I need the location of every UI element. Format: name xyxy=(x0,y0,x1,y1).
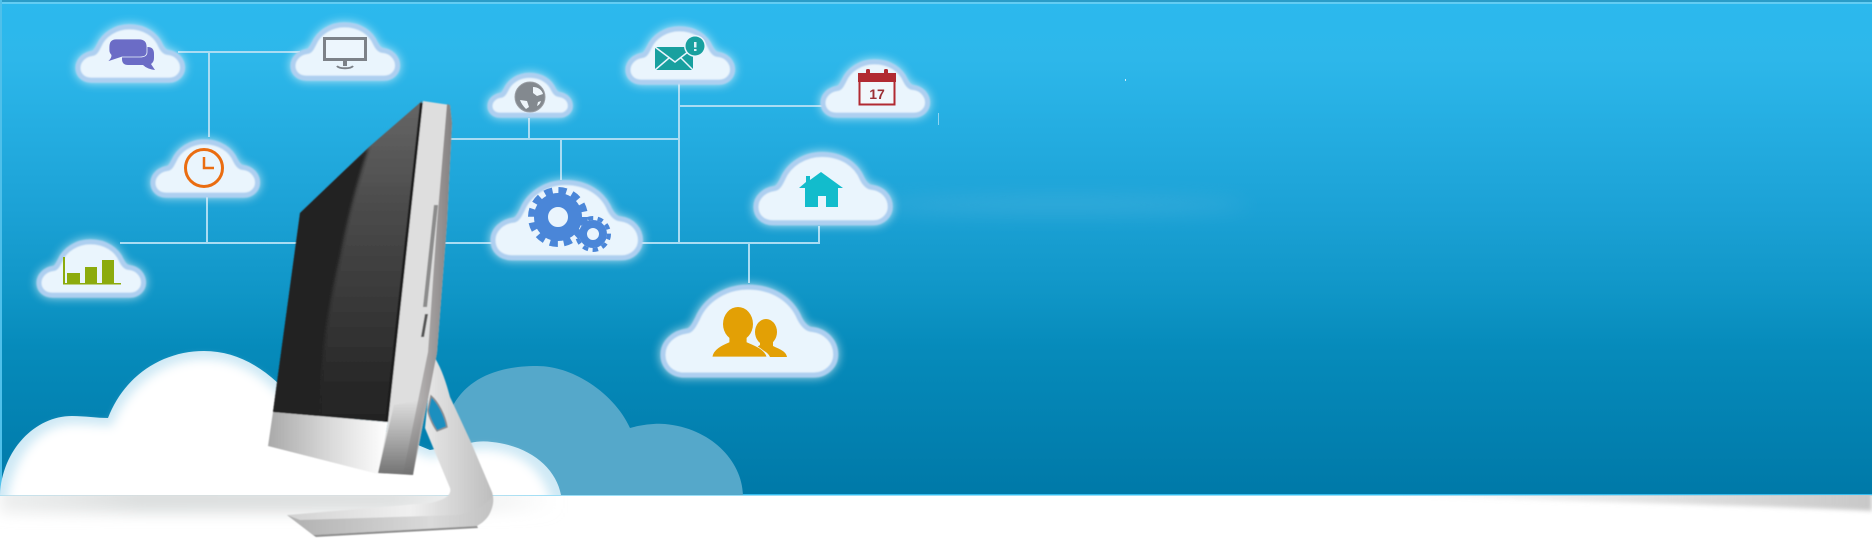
chin xyxy=(268,412,388,474)
side port xyxy=(421,314,428,337)
stand opening xyxy=(428,396,447,431)
icon: calendar: 17 xyxy=(869,86,885,102)
glass edge shadow xyxy=(385,103,424,422)
cloud: home xyxy=(756,154,890,223)
icon: calendar xyxy=(858,69,896,104)
stand back leg xyxy=(287,358,493,535)
foreground white cloud xyxy=(0,350,561,495)
cloud: people xyxy=(663,287,836,375)
side silver body xyxy=(378,101,452,475)
icon: bar chart xyxy=(63,257,121,284)
floor shadow right xyxy=(1436,495,1872,513)
icon: house xyxy=(799,172,843,207)
side dark edge xyxy=(403,104,452,475)
cloud: calendar xyxy=(823,62,928,115)
icon: people xyxy=(712,307,787,357)
floor shadow left xyxy=(0,495,552,518)
cloud: globe xyxy=(490,75,570,115)
cloud: monitor xyxy=(293,25,398,78)
connector lines xyxy=(120,52,825,283)
icon: chat bubbles xyxy=(107,39,155,70)
dark glass shade xyxy=(272,148,370,416)
cloud: mail xyxy=(628,29,732,82)
icon: envelope with badge xyxy=(655,35,706,70)
cloud: clock xyxy=(153,142,258,195)
icon: clock xyxy=(186,150,222,186)
base underside xyxy=(287,496,492,535)
icon: globe xyxy=(515,82,545,112)
cloud: chat xyxy=(78,27,182,80)
display glass xyxy=(273,101,422,422)
icon: monitor xyxy=(324,38,366,68)
icon clouds xyxy=(39,25,928,375)
cloud: chart xyxy=(39,242,144,295)
monitor and stand xyxy=(260,101,493,537)
cloud: gears xyxy=(493,183,640,258)
background blue cloud xyxy=(450,366,743,495)
lower side shade xyxy=(378,400,425,475)
icon: gears xyxy=(532,190,609,250)
disc slot xyxy=(423,205,438,307)
